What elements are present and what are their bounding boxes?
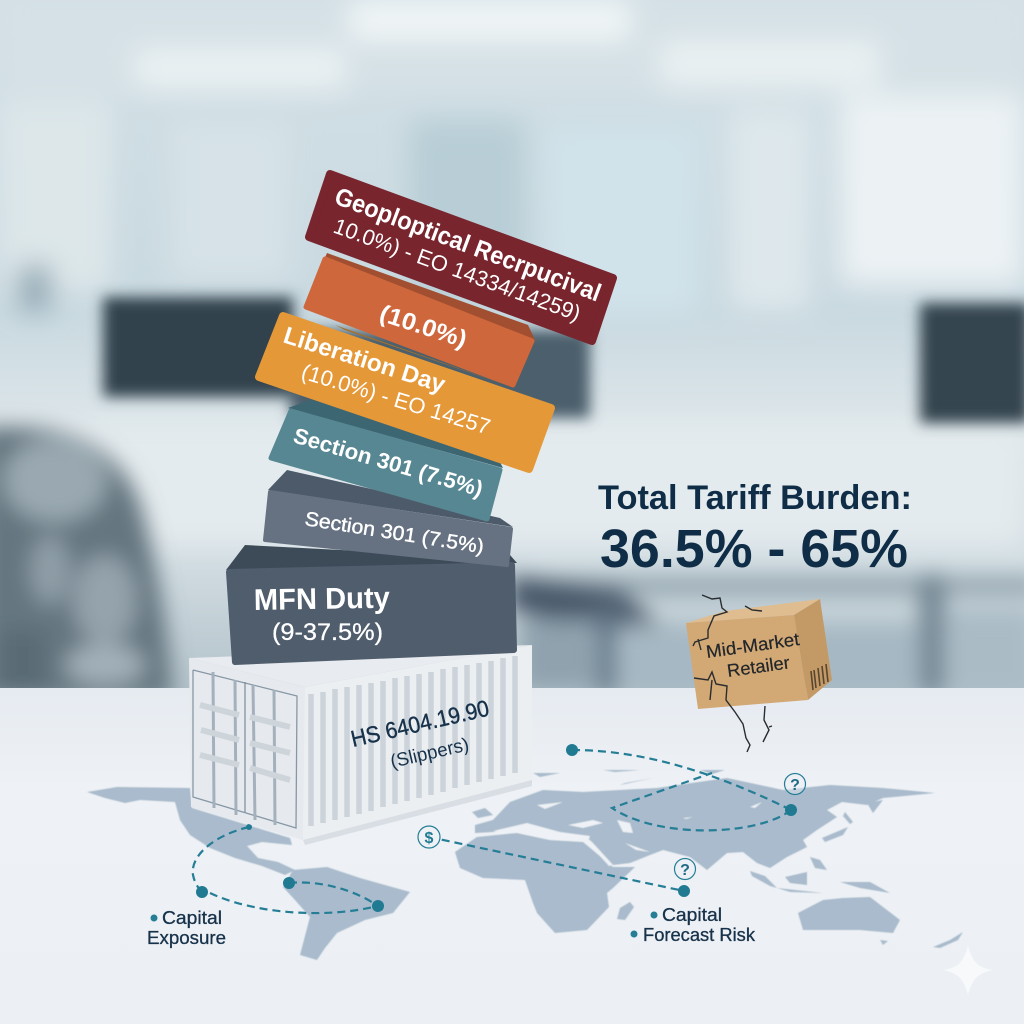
australia	[798, 897, 900, 945]
new zealand	[933, 932, 963, 948]
title: total tariff burden: Total Tariff Burden:	[598, 479, 912, 517]
block: liberation day amber: Liberation Day	[280, 322, 449, 399]
container doors	[189, 658, 305, 840]
map water gaps	[493, 802, 762, 866]
block: orange	[306, 253, 535, 388]
label: capital forecast risk: Capital	[662, 905, 722, 925]
icon: question east asia: ?	[790, 777, 800, 794]
icon: question indian ocean: ?	[680, 862, 690, 879]
box label: Mid-Market	[705, 629, 801, 662]
desk and furniture right	[510, 575, 1024, 695]
block: section 301 gray: Section 301 (7.5%)	[303, 508, 485, 558]
label: capital forecast risk	[630, 905, 756, 945]
arctic islands and britain	[472, 770, 725, 818]
monitors	[103, 297, 1024, 423]
sparkle watermark	[943, 945, 993, 995]
container label: HS 6404.19.90	[348, 695, 492, 752]
block: liberation day amber	[259, 316, 551, 469]
label: capital exposure: Exposure	[147, 928, 226, 948]
block: section 301 teal: Section 301 (7.5%)	[291, 423, 486, 501]
block: MFN duty: (9-37.5%)	[272, 619, 383, 646]
label: capital exposure	[147, 908, 226, 948]
table surface	[0, 688, 1024, 1024]
block: orange: (10.0%)	[376, 300, 470, 354]
box side	[794, 599, 832, 700]
icon: question indian ocean	[674, 858, 696, 880]
south america	[283, 867, 410, 960]
route: south america loop	[193, 827, 378, 913]
title: total tariff burden	[598, 479, 912, 579]
icon: dollar: $	[425, 830, 434, 847]
world map	[87, 770, 963, 960]
block: geopolitical red: Geoploptical Recrpucival	[331, 182, 605, 307]
block: section 301 teal	[271, 400, 503, 519]
box label: Retailer	[726, 652, 791, 681]
africa	[455, 833, 635, 933]
route markers	[196, 744, 797, 912]
block: MFN duty: MFN Duty	[254, 582, 390, 617]
label: capital exposure: Capital	[162, 908, 222, 928]
box front	[686, 615, 808, 709]
box cracks	[693, 595, 772, 752]
block: section 301 gray	[265, 470, 513, 565]
icon: dollar	[418, 826, 440, 848]
box label	[705, 629, 801, 681]
eurasia	[475, 778, 935, 870]
title: total tariff burden: 36.5% - 65%	[600, 519, 908, 579]
label: capital forecast risk: Forecast Risk	[643, 925, 756, 945]
north america	[87, 787, 295, 875]
box top	[686, 599, 820, 623]
block: MFN duty	[226, 545, 517, 662]
office chair	[0, 426, 172, 700]
container label	[348, 695, 492, 773]
japan and kamchatka	[822, 800, 883, 842]
container label: (Slippers)	[388, 734, 471, 773]
blurred office background	[0, 0, 1024, 700]
container side	[303, 645, 532, 840]
icon: question east asia	[784, 774, 806, 794]
block: liberation day amber: (10.0%) - EO 14257	[299, 359, 493, 439]
box barcode	[811, 664, 828, 690]
block: geopolitical red: 10.0%) - EO 14334/14259)	[330, 213, 584, 326]
cracked box: mid-market retailer	[686, 595, 832, 752]
madagascar	[617, 902, 634, 920]
route: eurasia loop	[429, 750, 791, 891]
container top	[189, 645, 532, 687]
southeast asia islands	[750, 857, 890, 893]
shipping container	[189, 645, 532, 845]
